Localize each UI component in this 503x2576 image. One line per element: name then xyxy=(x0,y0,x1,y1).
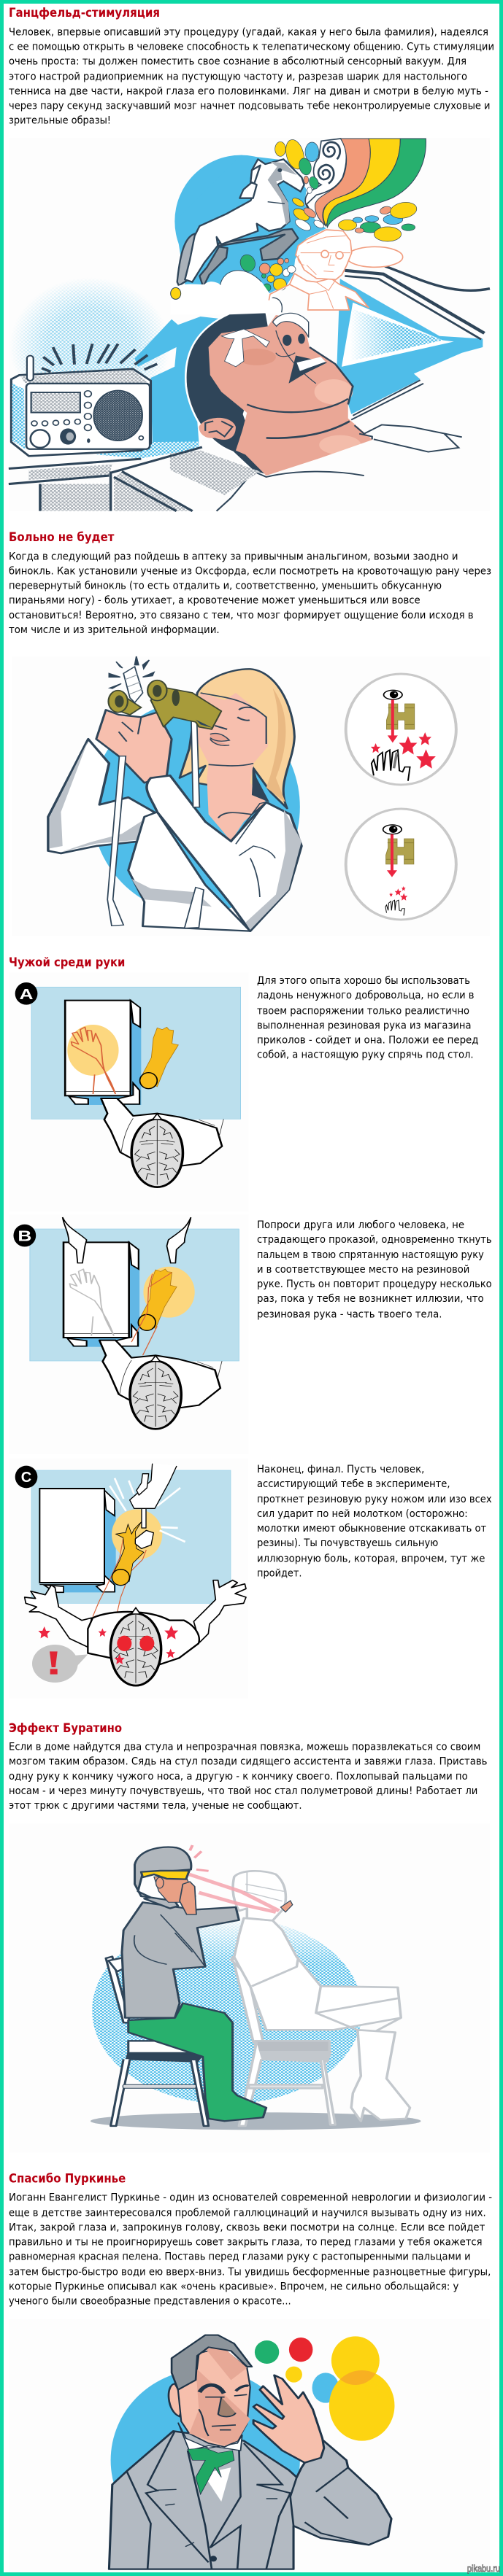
squashed glove xyxy=(113,1522,144,1581)
section: Ganzfeld stimulation text xyxy=(9,6,494,127)
badge B xyxy=(13,1225,36,1246)
colour blobs xyxy=(238,138,418,292)
text step C: сил ударит по ней молотком (осторожно: xyxy=(257,1508,468,1520)
table and bed xyxy=(170,451,260,495)
text step B: Попроси друга или любого человека, не xyxy=(257,1219,464,1231)
badge A: A xyxy=(20,986,34,1002)
face xyxy=(178,2347,250,2447)
text step B: пальцем в твою спрятанную настоящую руку xyxy=(257,1249,484,1261)
person from above with brain xyxy=(99,1341,222,1429)
nerve lines xyxy=(93,1539,146,1617)
text step B: резиновая рука - часть твоего тела. xyxy=(257,1308,442,1320)
text step B xyxy=(257,1219,492,1320)
green trousers xyxy=(128,2003,266,2121)
body text: правильно и ты не проигнорируешь совет закрыть глаза, то перед глазами у тебя окажется xyxy=(9,2236,482,2248)
text step A: твоем распоряжении только реалистично xyxy=(257,1005,469,1017)
pink sensation rays xyxy=(189,1874,279,1912)
body text xyxy=(9,1742,488,1812)
salmon portrait xyxy=(269,230,403,310)
highlight circle xyxy=(112,1509,162,1560)
torso xyxy=(88,1612,199,1665)
colour spots xyxy=(255,2336,394,2441)
body text: мозгом таким образом. Сядь на стул позади сидящего ассистента и завяжи глаза. Приставь xyxy=(9,1756,488,1768)
background rays, halftone glow and bed xyxy=(9,266,490,458)
highlight circle on rubber hand xyxy=(143,1267,195,1318)
faded hidden hand xyxy=(69,1269,114,1336)
text step A: собой, а настоящую руку спрячь под стол. xyxy=(257,1049,474,1060)
chair back xyxy=(106,1957,130,2022)
text step C xyxy=(257,1464,492,1580)
hair xyxy=(180,669,294,808)
blue circle behind horse xyxy=(174,155,307,287)
badge C: C xyxy=(21,1470,31,1486)
body text: Иоганн Евангелист Пуркинье - один из основателей современной неврологии и физиологии - xyxy=(9,2192,492,2204)
body text: равномерная красная пелена. Поставь перед глазами руку с растопыренными пальцами и xyxy=(9,2251,471,2262)
real hand outline xyxy=(72,1027,115,1094)
illustration step B: simultaneous touching xyxy=(9,1214,249,1454)
text step C: проткнет резиновую руку ножом или изо всех xyxy=(257,1494,492,1505)
impact lines xyxy=(110,1478,185,1542)
hands xyxy=(96,710,172,783)
back arm sleeve xyxy=(48,739,154,853)
ear xyxy=(169,2383,185,2416)
body text: которые Пуркинье описывал как «очень красивые». Впрочем, не сильно обольщайся: у xyxy=(9,2281,458,2293)
rainbow xyxy=(315,139,426,228)
assistant hand at nose xyxy=(280,1901,293,1912)
face and neck xyxy=(197,693,268,841)
heading: Эффект Буратино: Эффект Буратино xyxy=(9,1721,122,1736)
floor shadow xyxy=(91,2112,421,2130)
text step C: молотки имеют обыкновение отскакивать от xyxy=(257,1523,486,1535)
bandaged finger with pain burst xyxy=(109,656,154,702)
blue circle backdrop xyxy=(111,2369,300,2551)
body text: Итак, закрой глаза и, запрокинув голову, сквозь веки посмотри на солнце. Если все пойдет xyxy=(9,2222,485,2233)
blue ellipse backdrop xyxy=(91,700,300,914)
blindfold xyxy=(141,1871,189,1879)
badge C xyxy=(15,1466,37,1488)
text step A: ладонь ненужного добровольца, но если в xyxy=(257,990,475,1001)
text step C: ассистирующий тебе в эксперименте, xyxy=(257,1478,450,1490)
section: Эффект Буратино text xyxy=(9,1721,488,1812)
body text: носам - и через минуту почувствуешь, что твой нос стал полуметровой длины! Работает ли xyxy=(9,1785,477,1797)
pointing hands xyxy=(63,1217,191,1263)
text step A: выполненная резиновая рука из магазина xyxy=(257,1020,472,1031)
hand at nose xyxy=(180,1882,196,1914)
table and partition xyxy=(31,1470,231,1603)
shirt and lapels xyxy=(127,2431,369,2569)
body text: остановиться! Вероятно, это связано с тем, что мозг формирует ощущение боли исходя в xyxy=(9,610,474,621)
vision: horse, rainbow, colour blobs, portrait xyxy=(170,138,426,315)
man, radio, table xyxy=(9,312,490,511)
horse xyxy=(177,159,304,287)
hair xyxy=(185,312,269,475)
body text: Когда в следующий раз пойдешь в аптеку за привычным анальгином, возьми заодно и xyxy=(9,551,458,563)
text step C: Наконец, финал. Пусть человек, xyxy=(257,1464,424,1475)
blindfolded man xyxy=(106,1847,266,2126)
table and partition xyxy=(30,1229,239,1361)
ear xyxy=(199,418,236,440)
illustration: woman looking through binoculars xyxy=(12,656,490,936)
green cravat xyxy=(188,2448,234,2494)
pink burst marks xyxy=(190,1845,209,1871)
section: Чужой среди руки heading: Чужой среди руки xyxy=(9,955,125,970)
straps xyxy=(107,756,126,926)
heading: Больно не будет: Больно не будет xyxy=(9,530,115,545)
body text: этот трюк с другими частями тела, ученые не сообщают. xyxy=(9,1800,302,1812)
body text: том числе и из зрительной информации. xyxy=(9,624,220,636)
text step C: резины). Ты почувствуешь сильную xyxy=(257,1537,438,1549)
face and neck xyxy=(209,315,374,476)
binoculars xyxy=(109,680,221,729)
hammer and assistant hand xyxy=(130,1464,177,1548)
eye tape xyxy=(221,329,269,367)
diagram circle: strong pain xyxy=(346,674,456,785)
text step A xyxy=(257,975,479,1060)
body text: Человек, впервые описавший эту процедуру (угадай, какая у него была фамилия), надеялся xyxy=(9,26,488,38)
facial features xyxy=(199,2385,249,2436)
body text xyxy=(9,26,494,127)
body text: зрительные образы! xyxy=(9,115,111,127)
text step B: раз, пока у тебя не возникнет иллюзии, что xyxy=(257,1293,484,1305)
body text: одну руку к кончику чужого носа, а другую - к кончику своего. Похлопывай пальцами по xyxy=(9,1771,468,1782)
collar xyxy=(178,2423,242,2451)
body text xyxy=(9,551,491,636)
nose and nostrils xyxy=(283,335,291,346)
brain with pain spots xyxy=(110,1607,161,1685)
illustration: two people on chairs, Pinocchio effect xyxy=(91,1845,421,2130)
halftone blue circle xyxy=(92,1917,362,2104)
face xyxy=(154,1877,196,1902)
mouth xyxy=(288,356,327,384)
chair seat and legs xyxy=(128,2041,204,2055)
diagram circle: reduced pain xyxy=(346,809,456,920)
heading: Ганцфельд-стимуляция: Ганцфельд-стимуляция xyxy=(9,6,160,20)
text step C: иллюзорную боль, которая, впрочем, тут же xyxy=(257,1553,485,1565)
radio xyxy=(11,356,151,456)
badge A xyxy=(15,982,37,1005)
suit xyxy=(109,2431,391,2569)
illustration step A: rubber hand setup xyxy=(9,972,249,1212)
body text: еще в детстве заинтересовался проблемой галлюцинаций и научился вызывать одну из них. xyxy=(9,2207,486,2219)
body text: пираньями ногу) - боль утихает, а кровотечение может уменьшиться или вовсе xyxy=(9,595,421,607)
person from above with brain xyxy=(101,1098,223,1187)
body text: очень проста: ты должен поместить свое сознание в абсолютный сенсорный вакуум. Для xyxy=(9,55,466,67)
pain stars xyxy=(38,1626,178,1664)
sweater xyxy=(122,1902,239,2018)
rubber glove xyxy=(138,1269,177,1330)
body text: перевернутый бинокль (то есть отдалить и, соответственно, уменьшить обкусанную xyxy=(9,581,442,592)
text step A: приколов - сойдет и она. Положи ее перед xyxy=(257,1034,479,1046)
hair xyxy=(135,1847,191,1898)
highlight circle on hidden hand xyxy=(67,1025,119,1076)
shirt xyxy=(218,425,490,511)
illustration: man with ping-pong halves on eyes hallucinating xyxy=(9,138,490,511)
body text: ученого были своеобразные представления о красоте... xyxy=(9,2296,291,2308)
rubber glove xyxy=(140,1027,178,1089)
text step B: руке. Пусть он повторит процедуру несколько xyxy=(257,1279,492,1290)
section: Больно не будет text xyxy=(9,530,491,636)
body text: Если в доме найдутся два стула и непрозрачная повязка, можешь поразвлекаться со своим xyxy=(9,1742,480,1753)
cloud xyxy=(170,271,282,315)
illustration: Purkinje waving hand before eyes xyxy=(108,2334,394,2570)
body and front arm xyxy=(128,812,250,931)
hair xyxy=(172,2335,252,2390)
illustration step C: striking the rubber hand xyxy=(9,1459,248,1698)
red nerve lines xyxy=(131,1273,172,1355)
hand with spread fingers xyxy=(253,2375,324,2463)
text step B: страдающего проказой, одновременно ткнуть xyxy=(257,1234,492,1246)
assistant woman (ghosted) xyxy=(231,1871,410,2126)
radio sound lines xyxy=(42,344,157,372)
text step A: Для этого опыта хорошо бы использовать xyxy=(257,975,470,987)
text step C: пройдет. xyxy=(257,1568,302,1580)
text step B: и в соответствующее место на резиновой xyxy=(257,1264,469,1276)
arms xyxy=(25,1580,246,1647)
heading: Спасибо Пуркинье: Спасибо Пуркинье xyxy=(9,2172,126,2187)
white swirl bubble with spirals xyxy=(305,139,346,209)
badge B: B xyxy=(18,1228,31,1244)
body text xyxy=(9,2192,492,2308)
body text: тенниса на две части, накрой глаза его половинками. Ляг на диван и смотри в белую муть - xyxy=(9,86,488,98)
speech bubble with exclamation xyxy=(32,1645,88,1683)
table and partition xyxy=(31,987,241,1119)
section: Спасибо Пуркинье text xyxy=(9,2172,492,2308)
body text: этого настрой радиоприемник на пустующую частоту и, разрезав шарик для настольного xyxy=(9,71,467,83)
